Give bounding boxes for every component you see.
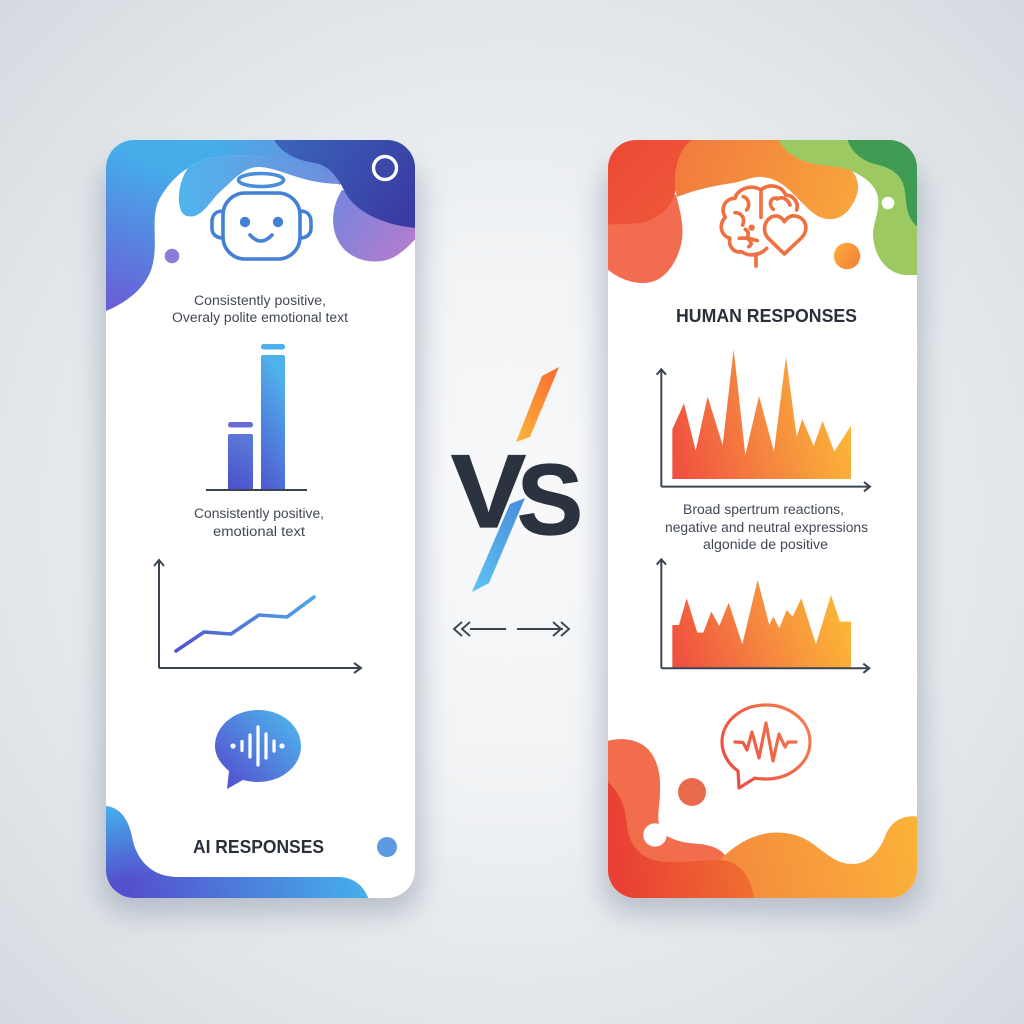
ring decoration xyxy=(374,156,396,180)
text: overly polite xyxy=(172,293,348,325)
VS letters xyxy=(451,434,583,556)
icon: brain and heart xyxy=(721,186,806,266)
icon: human speech bubble with waveform xyxy=(722,705,810,788)
area chart: top xyxy=(657,349,870,491)
panel: AI responses card xyxy=(100,135,421,914)
area chart: bottom xyxy=(657,559,869,673)
text: consistently positive: Consistently positive, xyxy=(194,506,324,521)
VS letters: V xyxy=(451,434,526,550)
bottom blob: AI card xyxy=(100,806,369,900)
label: AI responses: AI RESPONSES xyxy=(193,837,324,857)
VS emblem xyxy=(451,367,583,592)
text: broad spectrum: Broad spertrum reactions, xyxy=(683,502,844,517)
heading: human responses: HUMAN RESPONSES xyxy=(676,306,857,326)
top blobs: human card xyxy=(600,138,920,283)
dot decoration xyxy=(377,837,397,857)
line chart xyxy=(154,560,361,673)
white dot decoration xyxy=(882,197,894,209)
dot decoration xyxy=(165,249,179,263)
text: overly polite: Consistently positive, xyxy=(194,293,326,308)
text: consistently positive: emotional text xyxy=(213,524,305,539)
slash: blue xyxy=(472,498,525,592)
icon: robot with halo xyxy=(212,174,311,259)
text: consistently positive xyxy=(194,506,324,539)
white circle decoration xyxy=(643,823,667,847)
orange dot decoration xyxy=(834,243,860,269)
text: broad spectrum: algonide de positive xyxy=(703,537,828,552)
panel: Human responses card xyxy=(600,138,923,914)
text: broad spectrum: negative and neutral expressions xyxy=(665,520,868,535)
red circle decoration xyxy=(678,778,706,806)
VS letters: S xyxy=(517,444,583,556)
bottom blobs: human card xyxy=(600,739,920,900)
icon: AI speech bubble xyxy=(215,710,301,789)
slash: orange xyxy=(516,367,559,442)
bar chart xyxy=(206,344,307,491)
text: overly polite: Overaly polite emotional text xyxy=(172,310,348,325)
arrows: left and right xyxy=(454,622,569,636)
text: broad spectrum xyxy=(665,502,868,552)
top blobs: AI card xyxy=(100,135,420,311)
